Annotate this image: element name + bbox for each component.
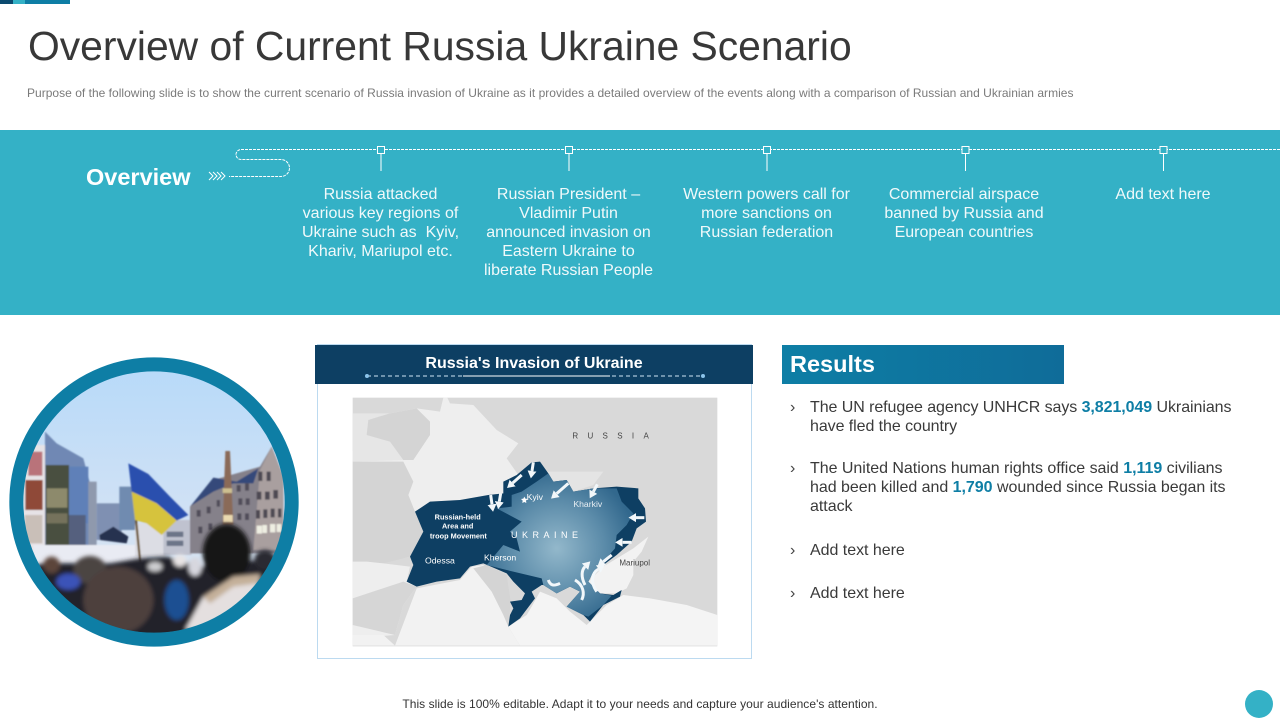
- map labels: Area and: [442, 522, 473, 531]
- left buildings: [44, 432, 90, 546]
- corner circle: [1245, 690, 1273, 718]
- timeline connector: [208, 146, 1280, 180]
- right buildings: [190, 447, 283, 553]
- result item 2: [790, 460, 1226, 515]
- result item 2: attack: [810, 498, 853, 515]
- result item 1: have fled the country: [810, 418, 957, 435]
- map of Ukraine with Russian-held areas: RUSSIA: [572, 431, 658, 440]
- footer note: This slide is 100% editable. Adapt it to your needs and capture your audience's attention.: [402, 697, 878, 711]
- panel: invasion map frame: [317, 344, 752, 659]
- timeline text 2: Eastern Ukraine to: [502, 243, 635, 260]
- flag: [136, 520, 141, 573]
- panel: overview band: [0, 130, 1280, 315]
- Ukrainian-held territory: [487, 473, 633, 617]
- map labels: UKRAINE: [511, 530, 583, 540]
- timeline text 5: Add text here: [1115, 186, 1211, 203]
- result item 4: ›: [790, 585, 795, 602]
- result item 2: ›: [790, 460, 795, 477]
- invasion map heading: Russia's Invasion of Ukraine: [425, 355, 643, 372]
- map labels: Russian-held: [435, 512, 481, 521]
- timeline text 3: Western powers call for: [683, 186, 850, 203]
- result item 2: had been killed and 1,790 wounded since Russia began its: [810, 479, 1226, 496]
- timeline text 2: announced invasion on: [486, 224, 651, 241]
- title: Overview of Current Russia Ukraine Scenario: [28, 23, 852, 69]
- result item 1: ›: [790, 399, 795, 416]
- timeline text 3: more sanctions on: [701, 205, 832, 222]
- timeline text 1: Khariv, Mariupol etc.: [308, 243, 453, 260]
- timeline text 1: Ukraine such as Kyiv,: [302, 224, 459, 241]
- photo: Ukrainian flag at a rally in a circular frame: [9, 357, 299, 647]
- result item 2: The United Nations human rights office said 1,119 civilians: [810, 460, 1222, 477]
- result item 4: Add text here: [810, 585, 905, 602]
- map labels: Kyiv: [527, 492, 544, 502]
- result item 1: The UN refugee agency UNHCR says 3,821,049 Ukrainians: [810, 399, 1231, 416]
- map labels: Kharkiv: [573, 499, 603, 509]
- timeline text 3: Russian federation: [700, 224, 833, 241]
- timeline text 1: various key regions of: [303, 205, 458, 222]
- timeline text 2: [484, 186, 653, 279]
- map labels: troop Movement: [430, 531, 487, 540]
- top accent bar: [0, 0, 70, 4]
- results heading: [782, 345, 1064, 384]
- map labels: [425, 492, 603, 566]
- light neighbouring countries: [353, 398, 518, 562]
- map of Ukraine with Russian-held areas: [352, 398, 718, 646]
- result item 3: Add text here: [810, 542, 905, 559]
- result item 1: [790, 399, 1231, 435]
- troop movement arrows: [491, 462, 644, 600]
- subtitle: Purpose of the following slide is to show the current scenario of Russia invasion of Ukraine as it provides a detailed overview of the events along with a comparison of Russian and Ukrainian armies: [27, 86, 1073, 100]
- result item 3: ›: [790, 542, 795, 559]
- map labels: Odessa: [425, 556, 455, 566]
- timeline text 2: Russian President –: [497, 186, 640, 203]
- timeline text 2: liberate Russian People: [484, 262, 653, 279]
- results heading: Results: [790, 351, 875, 377]
- Russian-held territory: [407, 462, 646, 627]
- timeline text 2: Vladimir Putin: [519, 205, 618, 222]
- timeline text 1: Russia attacked: [324, 186, 437, 203]
- timeline text 1: [302, 186, 459, 260]
- map labels: Kherson: [484, 553, 516, 563]
- timeline text 4: banned by Russia and: [884, 205, 1044, 222]
- timeline text 4: European countries: [895, 224, 1033, 241]
- invasion map heading: [315, 345, 753, 384]
- crowd: [38, 520, 275, 633]
- timeline text 4: [884, 186, 1044, 241]
- overview heading: Overview: [86, 164, 191, 190]
- timeline text 3: [683, 186, 850, 241]
- timeline text 4: Commercial airspace: [889, 186, 1039, 203]
- map of Ukraine with Russian-held areas: Mariupol: [619, 559, 650, 568]
